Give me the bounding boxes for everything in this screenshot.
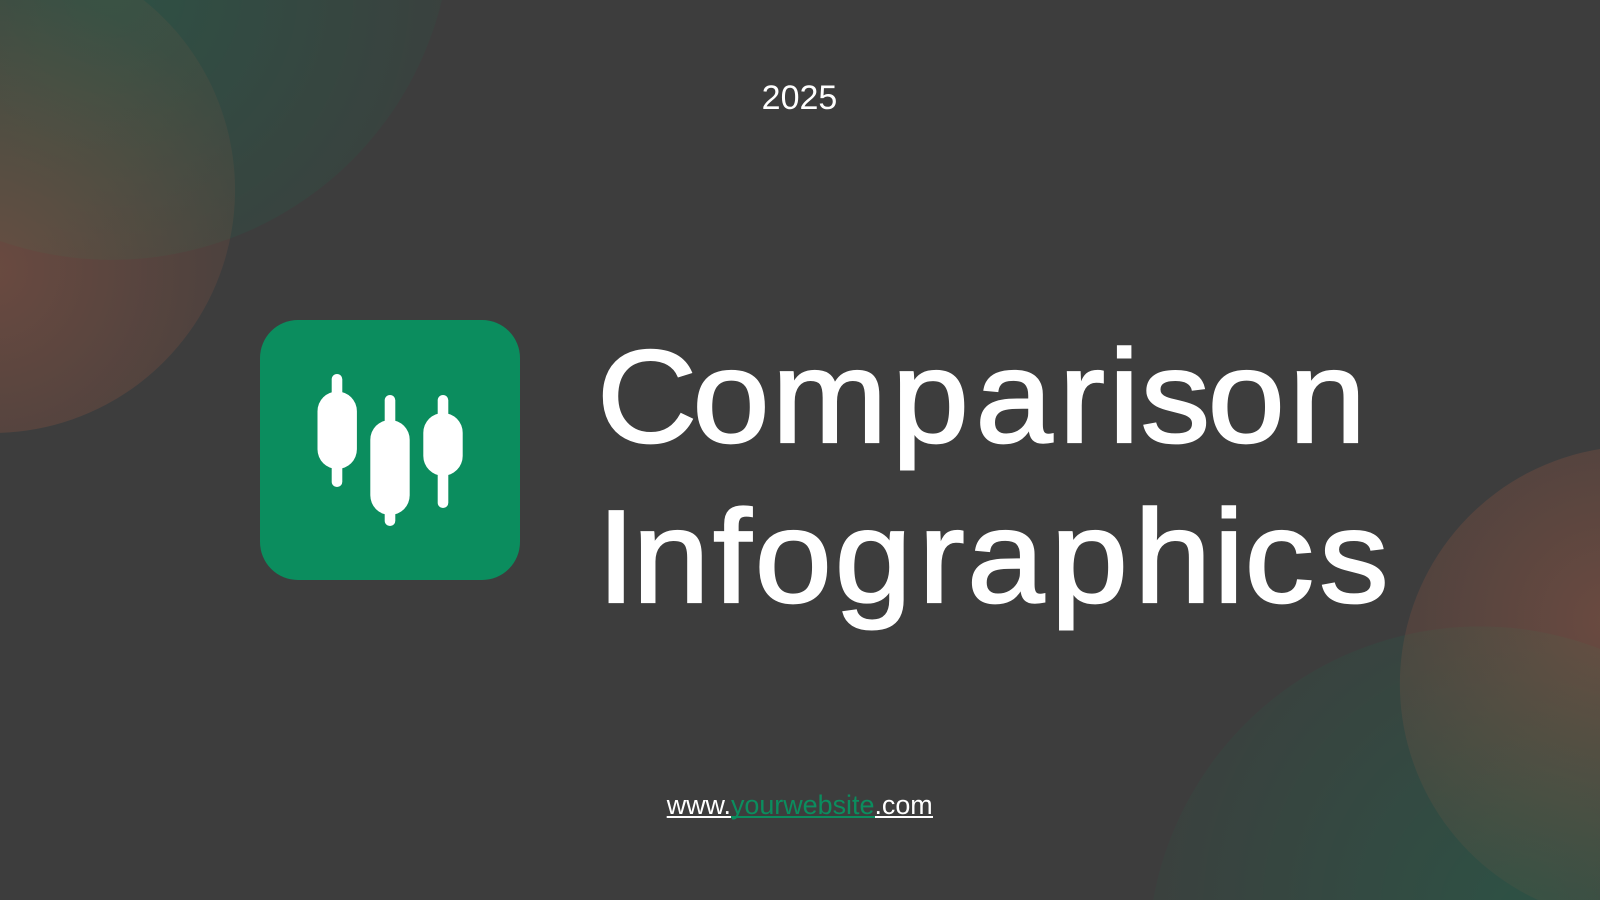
title line 1: Comparison: [597, 322, 1366, 470]
icon: third candlestick: [423, 395, 463, 508]
title line 2: Infographics: [597, 482, 1389, 630]
decorative circles: top left: [0, 0, 442, 433]
decorative circles: bottom right: [1153, 449, 1600, 900]
title: [597, 322, 1389, 630]
year label: 2025: [762, 79, 837, 117]
icon: first candlestick: [318, 374, 357, 487]
website link: www.yourwebsite.com: [666, 790, 933, 820]
icon: candlestick chart on green tile: [260, 320, 520, 580]
icon: second candlestick: [370, 395, 410, 526]
